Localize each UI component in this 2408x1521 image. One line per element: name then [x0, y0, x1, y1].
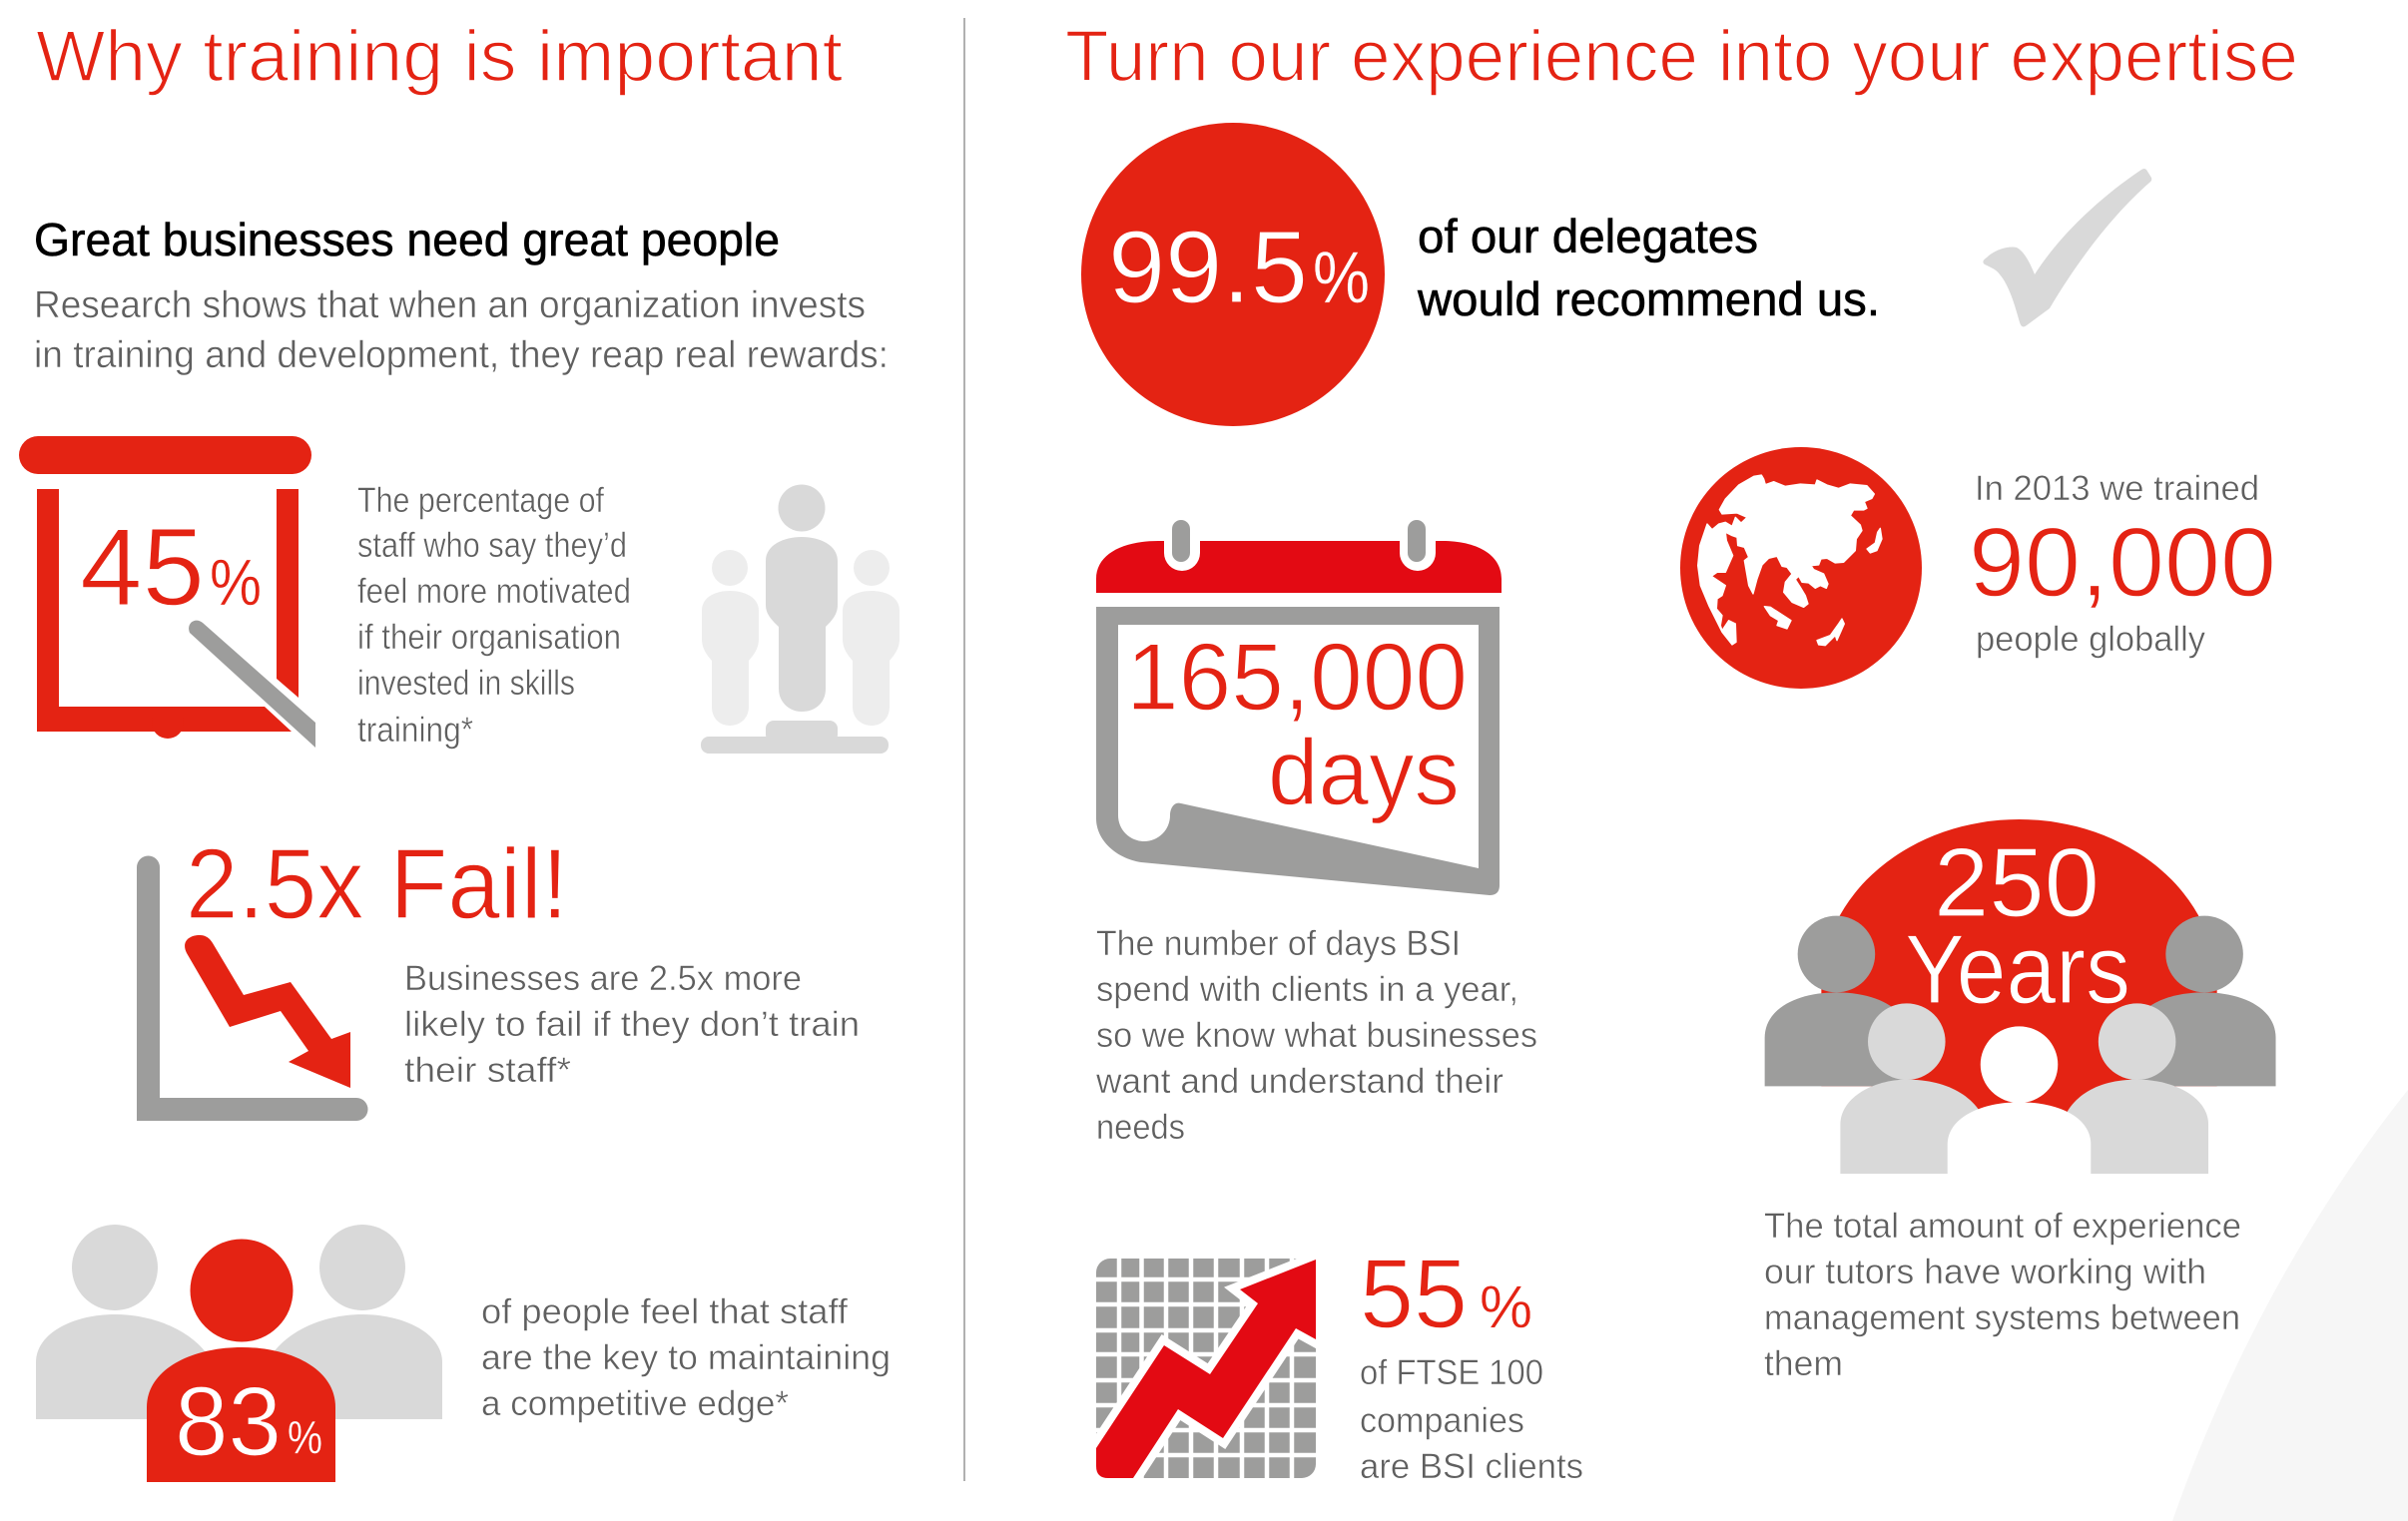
circle badge: 99.5% — [1081, 123, 1385, 426]
intro paragraph — [34, 284, 889, 376]
panel: 90,000 people — [1680, 447, 2276, 689]
text: key to competitive edge — [481, 1292, 891, 1423]
stat: 55%: 55 — [1360, 1239, 1468, 1348]
text: tutor experience: our tutors have working with — [1764, 1253, 2206, 1291]
stat: 165,000 days — [1126, 624, 1468, 824]
icon: calendar — [1096, 520, 1502, 895]
text: FTSE clients: companies — [1360, 1401, 1524, 1440]
panel: 165,000 days — [1095, 520, 1537, 1147]
stat: 250 years: 250 — [1934, 827, 2100, 937]
text: would recommend us — [1417, 210, 1880, 325]
text: likely to fail — [404, 959, 860, 1090]
stat: 90,000 people: In 2013 we trained — [1975, 469, 2259, 508]
icon: projector screen — [19, 436, 315, 748]
text: FTSE clients: of FTSE 100 — [1360, 1353, 1543, 1392]
icon: rising chart on grid — [1096, 1259, 1316, 1478]
circle badge: 99.5%: 99.5 — [1108, 210, 1308, 324]
panel: 99.5 percent recommend — [1081, 123, 2151, 426]
text: percentage of staff: feel more motivated — [357, 572, 631, 611]
stat: 90,000 people: 90,000 — [1969, 507, 2276, 617]
text: days with clients — [1095, 924, 1537, 1147]
stat: 83%: % — [288, 1411, 322, 1463]
stat: 55% — [1360, 1239, 1532, 1348]
panel: 45 percent motivated — [19, 436, 900, 754]
panel: 83 percent — [36, 1225, 891, 1482]
text: FTSE clients: are BSI clients — [1360, 1447, 1583, 1486]
icon: check mark — [1983, 169, 2151, 326]
text: likely to fail: their staff* — [404, 1051, 571, 1090]
text: days with clients: so we know what businesses — [1096, 1016, 1537, 1055]
text: days with clients: spend with clients in a year, — [1096, 970, 1518, 1009]
icon: three people — [36, 1225, 442, 1482]
text: percentage of staff — [357, 481, 631, 750]
text: key to competitive edge: of people feel that staff — [481, 1292, 848, 1331]
title: why training is important: Why training is important — [36, 17, 843, 97]
stat: 90,000 people: people globally — [1976, 620, 2205, 659]
text: days with clients: want and understand their — [1095, 1062, 1504, 1101]
icon: globe — [1680, 447, 1922, 689]
panel: 55 percent FTSE — [1096, 1239, 1583, 1486]
text: would recommend us: of our delegates — [1418, 210, 1758, 262]
stat: 45%: 45 — [80, 506, 205, 629]
stat: 83%: 83 — [175, 1366, 282, 1476]
text: percentage of staff: training* — [357, 711, 473, 750]
icon: group of people with red dome — [1765, 819, 2276, 1174]
subheading: Great businesses need great people — [34, 214, 780, 265]
text: percentage of staff: if their organisation — [357, 618, 621, 657]
text: would recommend us: would recommend us. — [1417, 272, 1880, 325]
panel: 2.5x fail — [137, 828, 860, 1121]
text: percentage of staff: invested in skills — [357, 664, 575, 703]
stat: 165,000 days: days — [1268, 720, 1460, 824]
circle badge: 99.5%: % — [1313, 238, 1370, 318]
text: tutor experience — [1764, 1207, 2241, 1383]
heading: 2.5x fail: 2.5x Fail! — [186, 828, 568, 940]
text: days with clients: The number of days BSI — [1096, 924, 1461, 963]
intro paragraph: Research shows that when an organization invests — [34, 284, 866, 326]
text: likely to fail: Businesses are 2.5x more — [404, 959, 802, 998]
stat: 45% — [80, 506, 262, 629]
stat: 250 years — [1905, 827, 2130, 1024]
stat: 165,000 days: 165,000 — [1126, 624, 1468, 731]
panel: 250 years — [1764, 819, 2276, 1383]
text: percentage of staff: The percentage of — [357, 481, 604, 520]
text: tutor experience: management systems between — [1764, 1298, 2240, 1337]
text: percentage of staff: staff who say they’d — [357, 526, 627, 565]
text: key to competitive edge: are the key to maintaining — [481, 1338, 891, 1377]
icon: growing people on podium — [701, 485, 900, 754]
text: likely to fail: likely to fail if they don’t train — [404, 1005, 860, 1044]
stat: 250 years: Years — [1905, 914, 2130, 1024]
text: tutor experience: The total amount of experience — [1764, 1207, 2241, 1246]
stat: 45%: % — [210, 545, 262, 619]
text: days with clients: needs — [1096, 1108, 1185, 1147]
text: FTSE clients — [1360, 1353, 1583, 1486]
text: tutor experience: them — [1764, 1344, 1843, 1383]
intro text block — [34, 214, 889, 376]
stat: 90,000 people — [1969, 469, 2276, 659]
intro paragraph: in training and development, they reap real rewards: — [34, 334, 889, 376]
icon: falling chart — [137, 856, 368, 1121]
text: key to competitive edge: a competitive edge* — [481, 1384, 789, 1423]
stat: 55%: % — [1480, 1273, 1532, 1340]
title: turn our experience into your expertise: Turn our experience into your expertise — [1065, 17, 2298, 97]
